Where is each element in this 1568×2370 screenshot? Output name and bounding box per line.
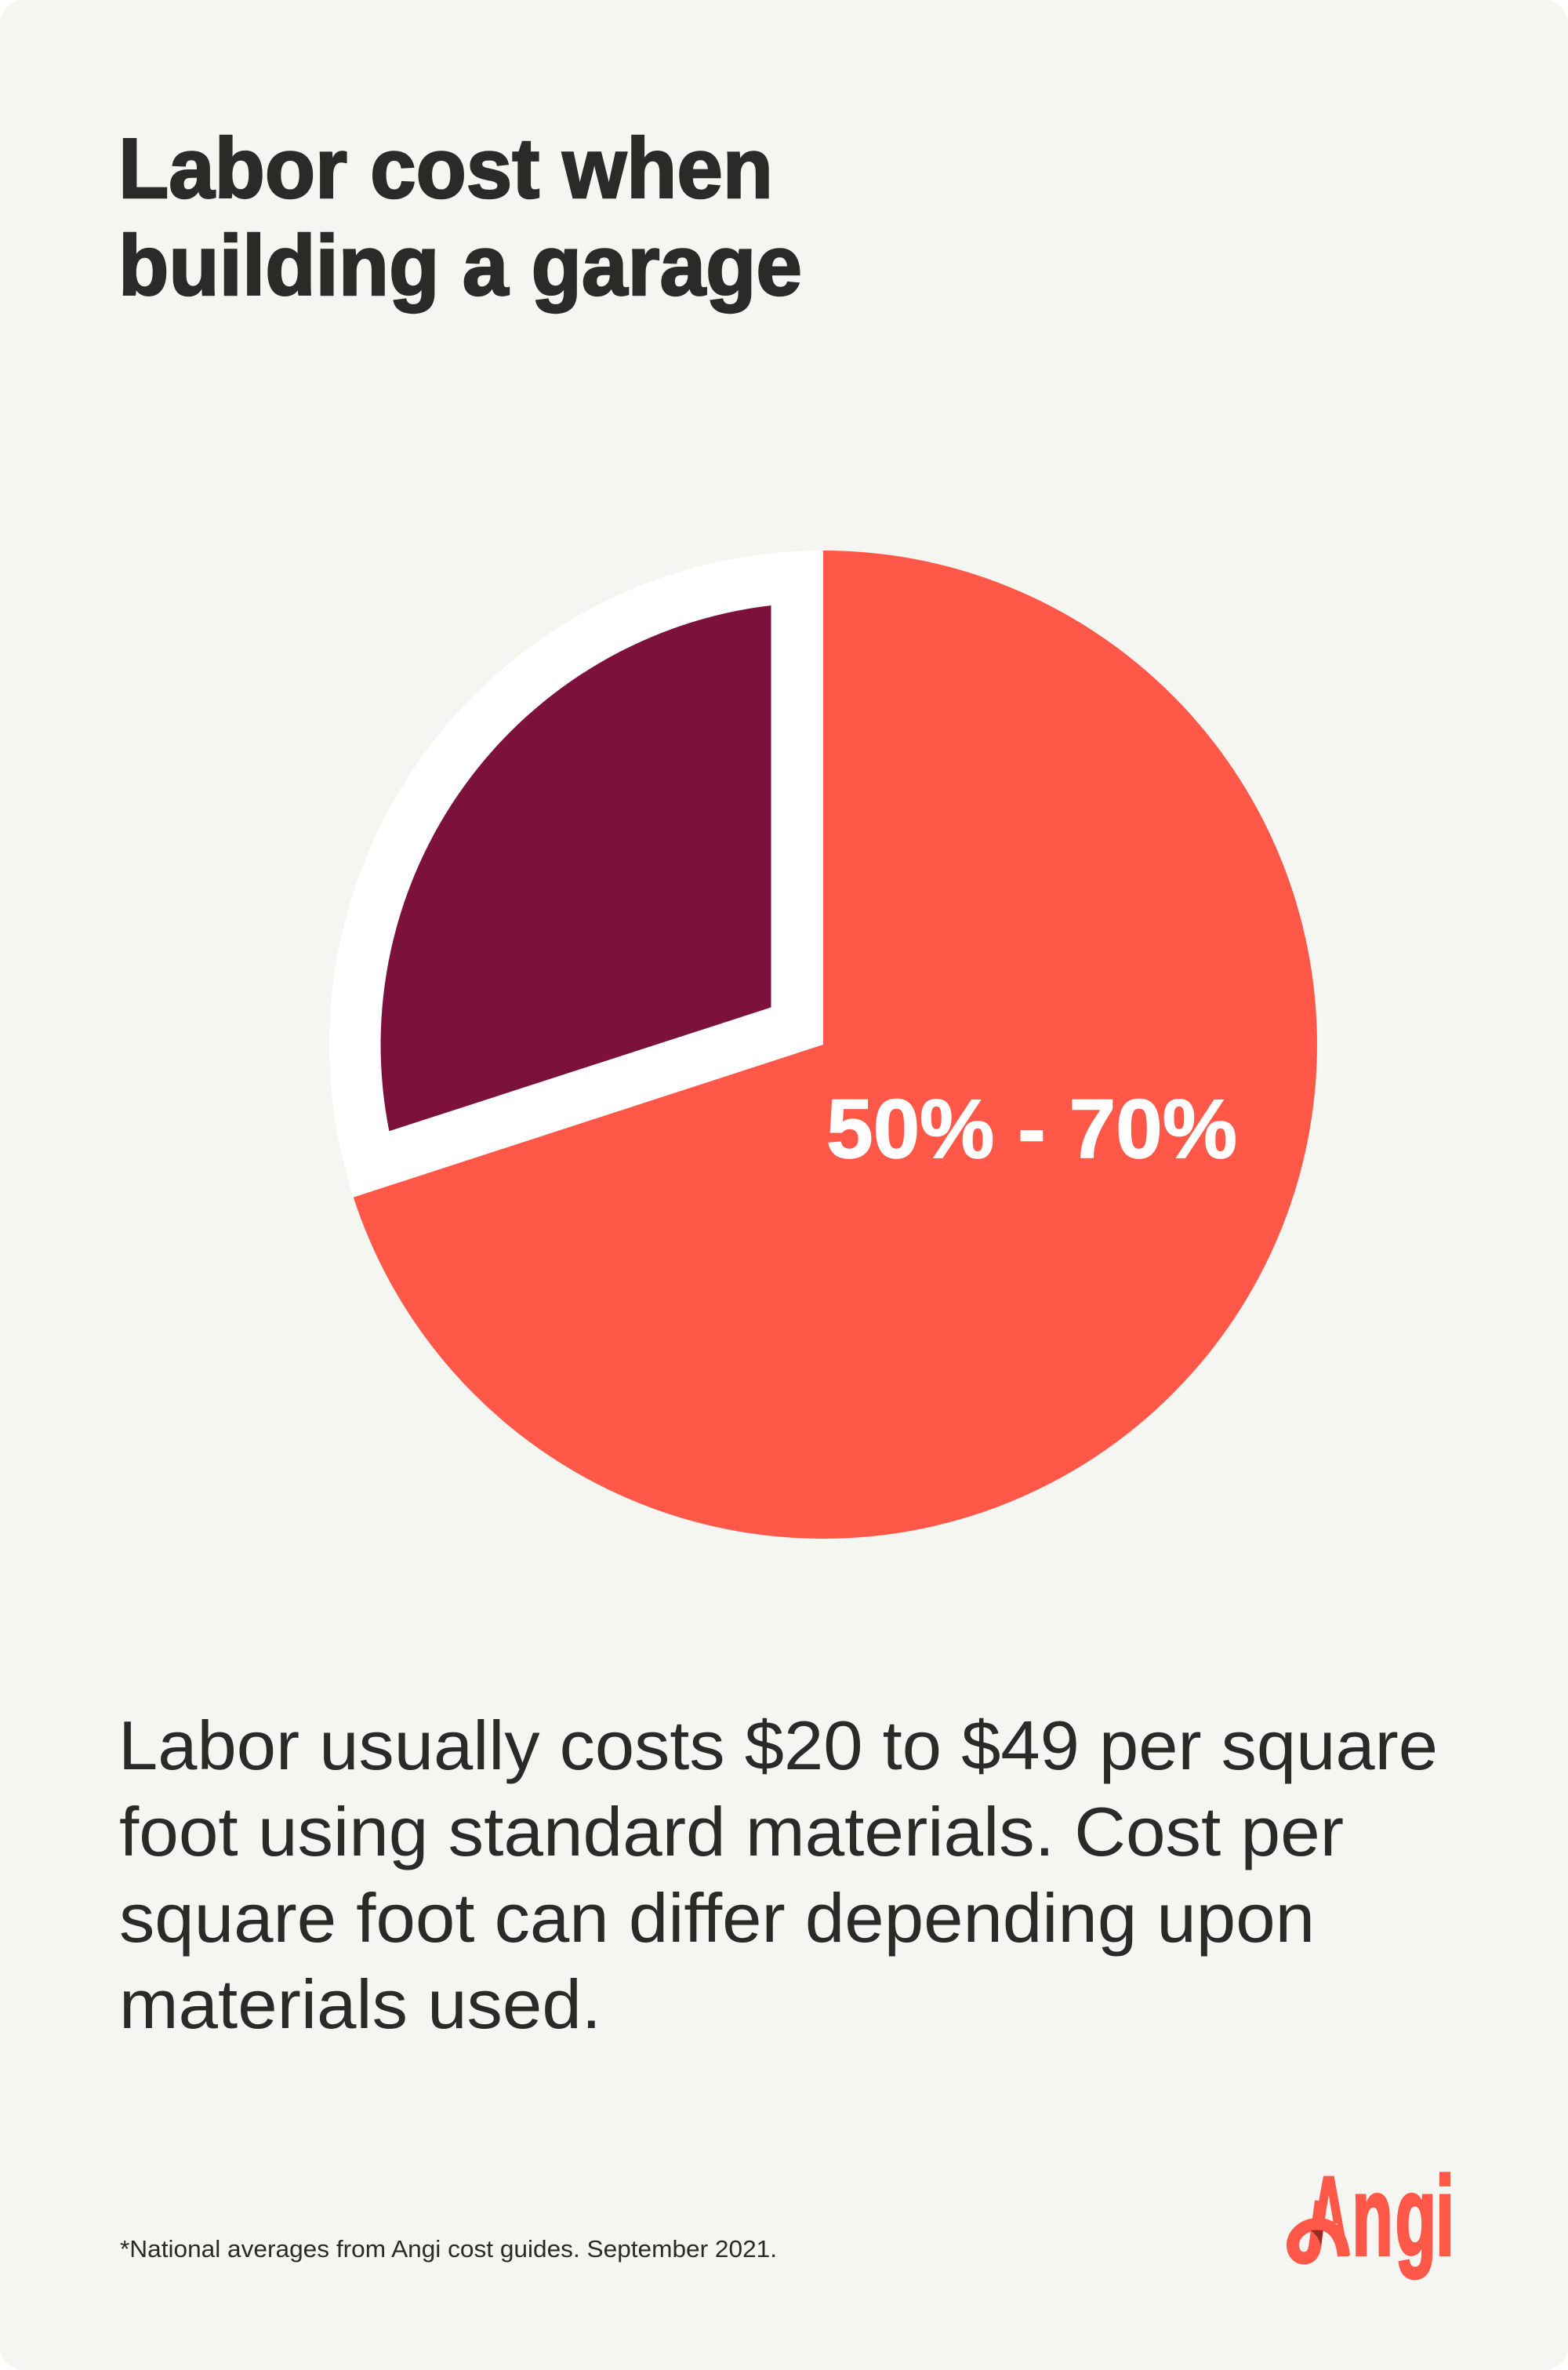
body text: square foot can differ depending upon [119,1879,1315,1957]
body text: foot using standard materials. Cost per [119,1793,1344,1870]
body text: materials used. [119,1965,601,2043]
pie label: 50% - 70% [826,1081,1237,1176]
pie chart [329,551,1317,1539]
logo swash [1293,2201,1344,2258]
title [118,121,802,314]
footnote: *National averages from Angi cost guides. September 2021. [120,2235,777,2263]
body text [118,1707,1438,2043]
logo letters ngi: ngi [1352,2153,1454,2278]
pie slice: white remainder backing [329,551,1317,1539]
body text: Labor usually costs $20 to $49 per square [118,1707,1438,1784]
title: building a garage [118,218,802,314]
logo letter A: A [1308,2154,1349,2278]
logo: Angi [1287,2172,1450,2281]
title: Labor cost when [118,121,773,216]
pie slice: maroon remainder [381,605,771,1131]
pie slice: labor share 70% [354,551,1317,1539]
